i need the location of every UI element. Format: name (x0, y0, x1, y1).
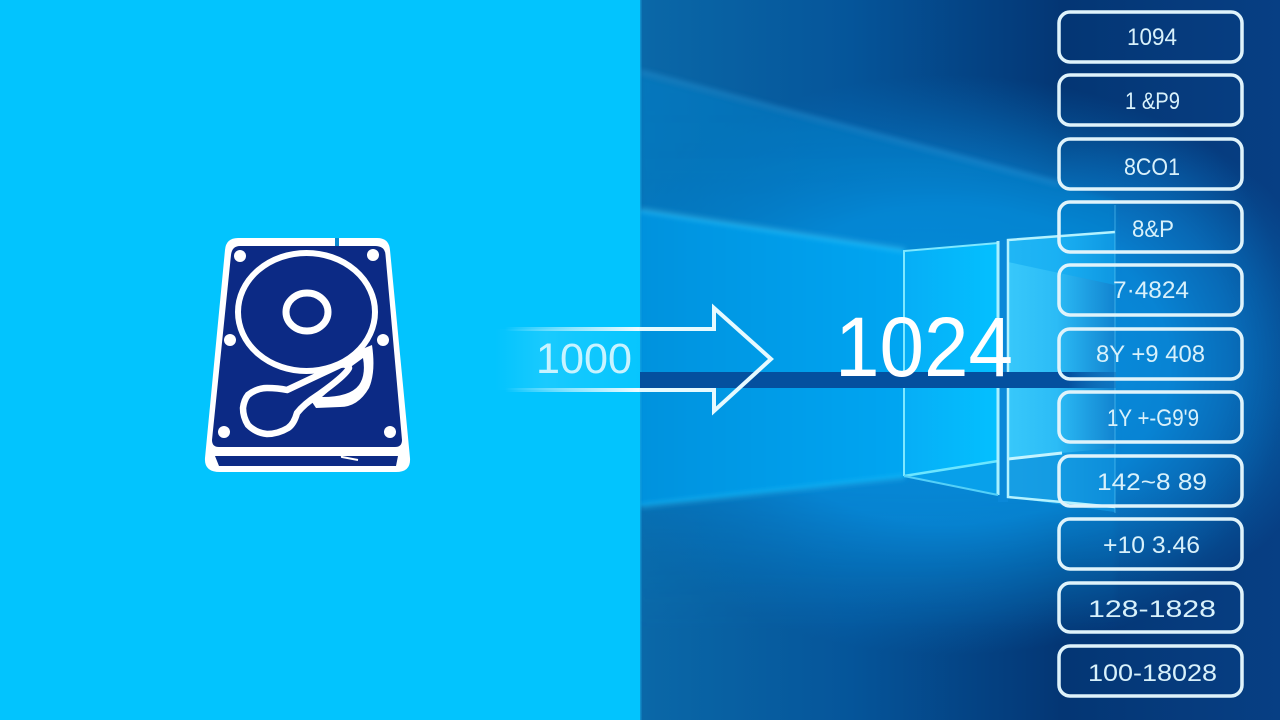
read arm (243, 364, 349, 434)
box 4: 8&P (1132, 216, 1174, 243)
label: 1024: 1024 (835, 300, 1013, 394)
box 8: 142~8 89 (1097, 469, 1207, 496)
panel: left cyan background (0, 0, 640, 720)
box 9: +10 3.46 (1103, 532, 1200, 559)
screws (218, 249, 396, 438)
box 8 (1059, 456, 1242, 506)
dark horizontal band (640, 372, 1116, 388)
list of value boxes (1059, 12, 1242, 696)
box 3: 8CO1 (1124, 154, 1180, 181)
box 10: 128-1828 (1088, 596, 1216, 623)
box 7: 1Y +-G9'9 (1107, 405, 1199, 432)
box 2: 1 &P9 (1125, 88, 1180, 115)
arrow (495, 308, 771, 411)
label: 1000: 1000 (536, 335, 632, 383)
box 5 (1059, 265, 1242, 315)
disc platter (238, 253, 375, 371)
box 1 (1059, 12, 1242, 62)
box 3 (1059, 139, 1242, 189)
box 10 (1059, 583, 1242, 632)
box 2 (1059, 75, 1242, 125)
base notch (340, 448, 358, 460)
crescent inner (322, 358, 364, 397)
box 9 (1059, 519, 1242, 569)
icon: Windows logo panes (904, 205, 1115, 513)
box 1: 1094 (1127, 24, 1177, 51)
arm crescent (312, 345, 373, 408)
disc hub (286, 293, 328, 331)
panel: right blue background (640, 0, 1280, 720)
box 7 (1059, 392, 1242, 442)
box 5: 7·4824 (1113, 277, 1189, 304)
box 4 (1059, 202, 1242, 252)
box 11: 100-18028 (1088, 660, 1217, 687)
box 6 (1059, 329, 1242, 379)
box 6: 8Y +9 408 (1096, 341, 1205, 368)
top notch (335, 238, 339, 246)
icon: hard disk drive (205, 238, 410, 472)
box 11 (1059, 646, 1242, 696)
